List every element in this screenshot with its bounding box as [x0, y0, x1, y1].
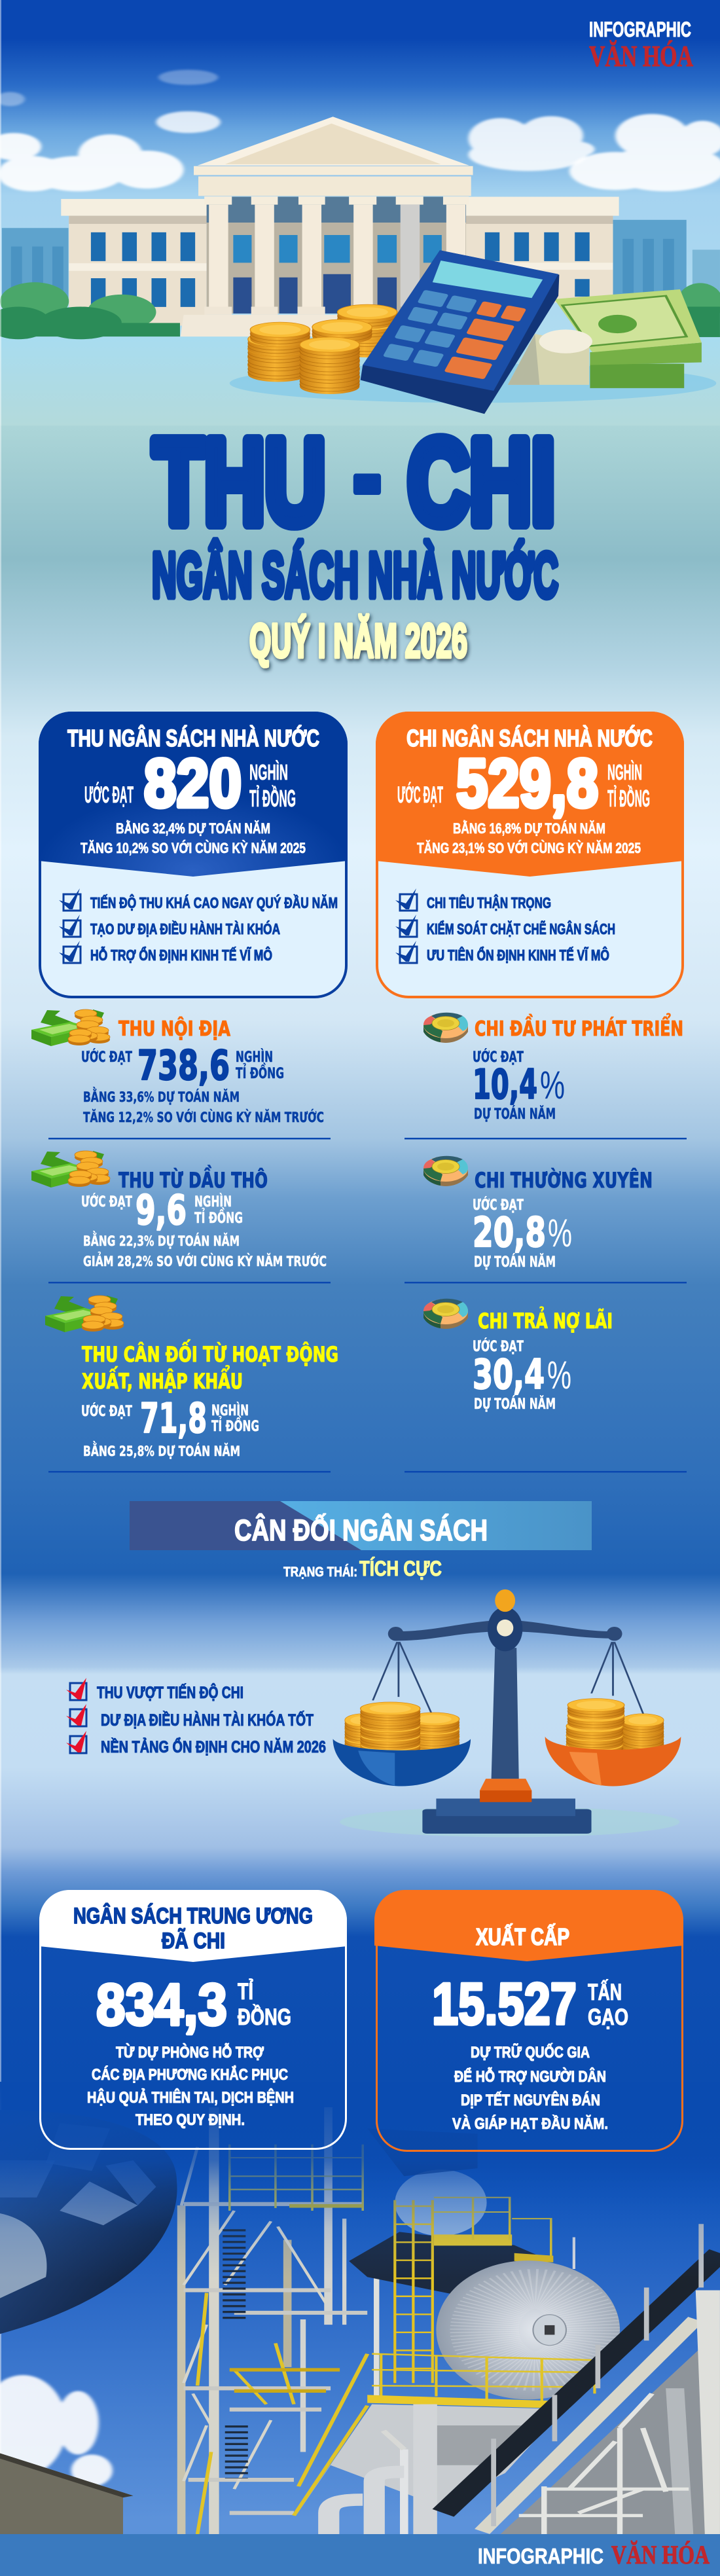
figure: 834,3: [96, 1972, 227, 2038]
card: xuất cấp: [374, 1890, 683, 2151]
gold coin stacks: [248, 304, 397, 394]
description: [452, 2043, 608, 2133]
cloud: [0, 2375, 113, 2486]
checklist: [395, 888, 615, 964]
upper vessel: [349, 2128, 574, 2296]
comparison lines: TĂNG 10,2% SO VỚI CÙNG KỲ NĂM 2025: [81, 840, 306, 856]
hero illustration: state building, coins, calculator and banknotes: [0, 70, 720, 426]
figure: GẠO: [588, 2005, 628, 2030]
footer bar: [0, 2534, 720, 2576]
description: HẬU QUẢ THIÊN TAI, DỊCH BỆNH: [87, 2088, 294, 2107]
label: ƯỚC ĐẠT: [473, 1338, 524, 1355]
comparison lines: TĂNG 23,1% SO VỚI CÙNG KỲ NĂM 2025: [417, 840, 641, 856]
icon: money and coins: [31, 1151, 110, 1188]
heading: XUẤT, NHẬP KHẨU: [82, 1366, 243, 1394]
header band: [376, 712, 684, 877]
revenue item: thu nội địa: [31, 1009, 324, 1125]
bushes: [0, 282, 720, 339]
figure: [81, 1042, 284, 1089]
comparison lines: BẰNG 16,8% DỰ TOÁN NĂM: [453, 820, 605, 837]
checklist: KIỂM SOÁT CHẶT CHẼ NGÂN SÁCH: [427, 920, 615, 937]
low building: [0, 2454, 133, 2534]
panel: thu ngân sách: [39, 712, 348, 997]
figure: 738,6: [137, 1042, 230, 1089]
revenue item: thu cân đối xuất nhập khẩu: [45, 1296, 338, 1459]
description: TỪ DỰ PHÒNG HỖ TRỢ: [116, 2042, 264, 2061]
checklist: [59, 888, 338, 964]
figure: [81, 1394, 259, 1442]
brand logo top: [589, 18, 693, 73]
heading: THU NỘI ĐỊA: [118, 1017, 230, 1041]
building wings: [61, 197, 619, 326]
title block: [152, 405, 558, 668]
description: THEO QUY ĐỊNH.: [135, 2111, 245, 2129]
figure: TẤN: [588, 1979, 622, 2005]
figure 529,8: ƯỚC ĐẠT: [397, 782, 443, 808]
figure: TỈ: [238, 1978, 253, 2005]
figure 529,8: NGHÌN: [607, 760, 642, 784]
panel: chi ngân sách: [376, 712, 684, 997]
spending item: chi trả nợ lãi: [423, 1299, 613, 1413]
card header: [39, 1890, 347, 1962]
comparison lines: BẰNG 33,6% DỰ TOÁN NĂM: [83, 1087, 240, 1105]
comparison lines: BẰNG 22,3% DỰ TOÁN NĂM: [83, 1231, 240, 1249]
footer word INFOGRAPHIC: INFOGRAPHIC: [478, 2544, 603, 2568]
conveyor and gantry: [443, 2224, 720, 2534]
comparison lines: GIẢM 28,2% SO VỚI CÙNG KỲ NĂM TRƯỚC: [83, 1252, 327, 1269]
figure 820: NGHÌN: [249, 760, 288, 784]
icon: pie chart coin: [423, 1013, 468, 1043]
heading: THU TỪ DẦU THÔ: [118, 1165, 268, 1193]
card: ngân sách trung ương: [39, 1890, 347, 2149]
status line: TÍCH CỰC: [359, 1557, 442, 1580]
icon: pie chart coin: [423, 1299, 468, 1329]
spending item: chi đầu tư phát triển: [423, 1013, 683, 1123]
comparison line: BẰNG 25,8% DỰ TOÁN NĂM: [83, 1441, 240, 1459]
comparison lines: [83, 1087, 324, 1125]
building portico: [181, 117, 473, 336]
icon: pie chart coin: [423, 1156, 468, 1186]
figure: [81, 1186, 243, 1234]
main title THU - CHI: CHI: [408, 414, 555, 549]
background photo: refinery: [0, 2107, 720, 2534]
steel support: [294, 2404, 551, 2534]
checklist: TẠO DƯ ĐỊA ĐIỀU HÀNH TÀI KHÓA: [90, 920, 280, 937]
description: DỊP TẾT NGUYÊN ĐÁN: [461, 2091, 600, 2109]
card header: [374, 1890, 683, 1961]
heading: [82, 1339, 338, 1394]
panel: chi ngân sách: TỈ ĐỒNG: [607, 784, 650, 812]
figure: 71,8: [140, 1394, 207, 1442]
figure: TỈ ĐỒNG: [194, 1208, 243, 1227]
comparison lines: BẰNG 32,4% DỰ TOÁN NĂM: [116, 820, 270, 837]
description: [87, 2042, 294, 2129]
clouds: [0, 70, 720, 191]
calculator: [361, 250, 559, 414]
note: DỰ TOÁN NĂM: [474, 1254, 556, 1271]
card heading: NGÂN SÁCH TRUNG ƯƠNG: [73, 1904, 313, 1929]
banknotes: [508, 289, 702, 388]
heading: THU CÂN ĐỐI TỪ HOẠT ĐỘNG: [82, 1339, 338, 1367]
figure: 9,6: [135, 1186, 187, 1234]
panel: thu ngân sách: TỈ ĐỒNG: [249, 784, 296, 812]
tower frame: [181, 2107, 376, 2534]
figure: ƯỚC ĐẠT: [81, 1193, 132, 1210]
card heading: ĐÃ CHI: [162, 1929, 225, 1953]
balance checklist: [66, 1678, 326, 1756]
figure: %: [547, 1353, 571, 1397]
photo fade: [0, 2082, 720, 2278]
figure: ƯỚC ĐẠT: [81, 1049, 132, 1066]
silver tank: [436, 2260, 620, 2399]
heading: THU NGÂN SÁCH NHÀ NƯỚC: [67, 724, 319, 752]
main title THU - CHI: [153, 405, 555, 549]
reflection puddle: [230, 364, 716, 403]
card heading: [73, 1904, 313, 1953]
comparison lines: [81, 820, 306, 856]
pipes: [329, 2472, 404, 2534]
comparison lines: [417, 820, 641, 856]
heading: CHI THƯỜNG XUYÊN: [475, 1167, 653, 1193]
figure: 10,4: [473, 1061, 537, 1108]
checklist: CHI TIÊU THẬN TRỌNG: [427, 894, 551, 911]
status line: TRẠNG THÁI:: [283, 1565, 357, 1580]
main title THU - CHI: THU: [153, 414, 325, 549]
checklist: HỖ TRỢ ỔN ĐỊNH KINH TẾ VĨ MÔ: [90, 945, 272, 964]
checklist: ƯU TIÊN ỔN ĐỊNH KINH TẾ VĨ MÔ: [427, 946, 609, 964]
ground: [0, 336, 720, 426]
comparison lines: TĂNG 12,2% SO VỚI CÙNG KỲ NĂM TRƯỚC: [83, 1109, 324, 1125]
figure: 15.527: [432, 1972, 577, 2037]
header band: [39, 712, 348, 877]
status line: [283, 1557, 442, 1580]
figure: ƯỚC ĐẠT: [81, 1403, 132, 1420]
comparison lines: [83, 1231, 327, 1269]
figure: NGHÌN: [236, 1049, 273, 1066]
heading: CHI TRẢ NỢ LÃI: [478, 1307, 613, 1333]
description: DỰ TRỮ QUỐC GIA: [471, 2043, 590, 2061]
figure: 30,4: [473, 1351, 545, 1398]
figure: NGHÌN: [194, 1193, 232, 1210]
icon: money and coins: [45, 1296, 124, 1332]
figure: %: [540, 1063, 565, 1107]
icon: money and coins: [31, 1009, 110, 1046]
section banner: cân đối ngân sách: CÂN ĐỐI NGÂN SÁCH: [234, 1514, 488, 1547]
description: ĐỂ HỖ TRỢ NGƯỜI DÂN: [454, 2067, 606, 2086]
yellow ladder cage: [395, 2200, 433, 2383]
figure: TỈ ĐỒNG: [211, 1416, 259, 1435]
yellow rail and platform: [294, 2354, 606, 2516]
balance checklist: DƯ ĐỊA ĐIỀU HÀNH TÀI KHÓA TỐT: [101, 1710, 314, 1730]
figure 820: [84, 746, 296, 822]
background buildings: [2, 220, 720, 299]
figure: TỈ ĐỒNG: [236, 1063, 284, 1082]
description: CÁC ĐỊA PHƯƠNG KHẮC PHỤC: [92, 2065, 288, 2084]
main title THU - CHI: -: [352, 405, 382, 543]
note: DỰ TOÁN NĂM: [474, 1106, 556, 1123]
note: DỰ TOÁN NĂM: [474, 1396, 556, 1413]
section banner: cân đối ngân sách: [130, 1501, 592, 1550]
label: ƯỚC ĐẠT: [473, 1049, 524, 1066]
period: QUÝ I NĂM 2026: [249, 615, 467, 668]
figure: NGHÌN: [211, 1402, 249, 1419]
figure: ĐỒNG: [238, 2004, 291, 2030]
figure: %: [548, 1211, 572, 1255]
icon: balance scale with coins: [333, 1589, 681, 1837]
figure 529,8: [397, 746, 650, 822]
checklist: TIẾN ĐỘ THU KHÁ CAO NGAY QUÝ ĐẦU NĂM: [90, 894, 338, 911]
figure: 20,8: [473, 1208, 546, 1256]
figure 529,8: 529,8: [456, 746, 598, 822]
label: ƯỚC ĐẠT: [473, 1197, 524, 1214]
description: VÀ GIÁP HẠT ĐẦU NĂM.: [452, 2114, 608, 2133]
figure 820: 820: [144, 746, 242, 822]
edge strip: [0, 0, 1, 2534]
figure 820: ƯỚC ĐẠT: [84, 782, 134, 808]
balance checklist: NỀN TẢNG ỔN ĐỊNH CHO NĂM 2026: [101, 1737, 326, 1756]
spherical tank: [0, 2110, 177, 2334]
balance checklist: THU VƯỢT TIẾN ĐỘ CHI: [97, 1682, 243, 1702]
card heading: XUẤT CẤP: [476, 1923, 569, 1950]
revenue item: thu từ dầu thô: [31, 1151, 327, 1269]
spending item: chi thường xuyên: [423, 1156, 653, 1271]
